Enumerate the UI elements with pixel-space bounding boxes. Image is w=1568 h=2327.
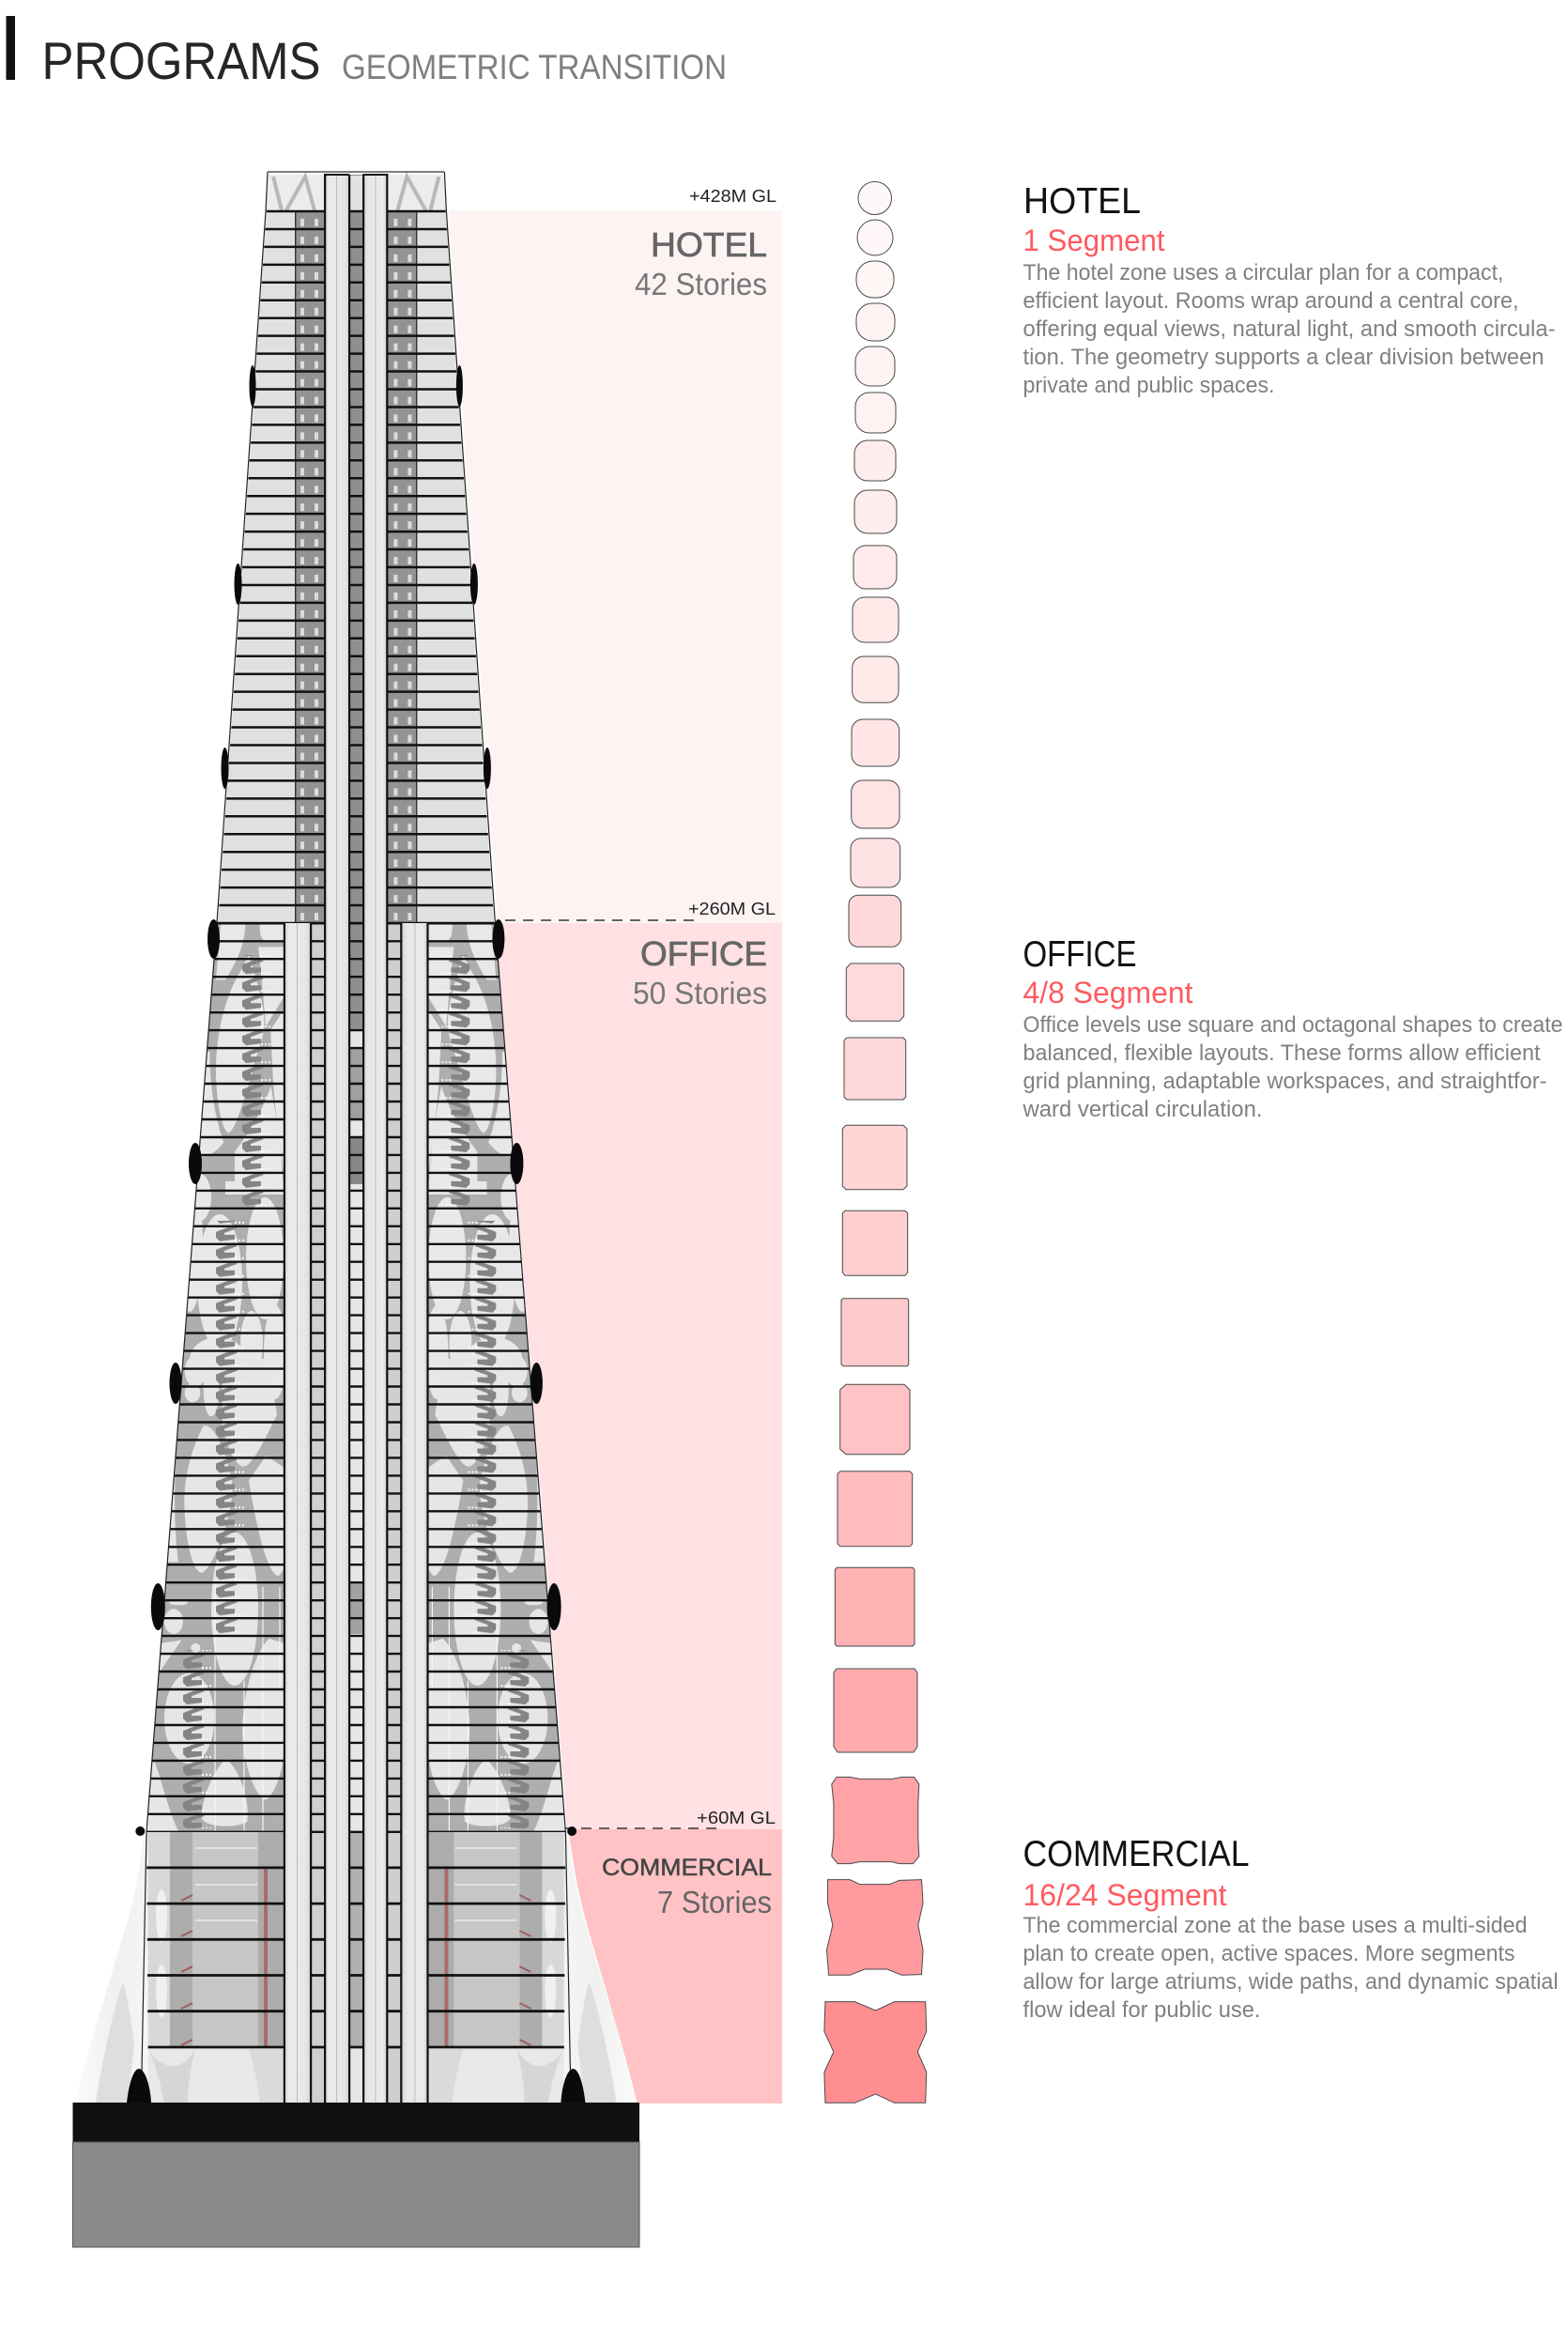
title bar: [6, 16, 15, 80]
roof line: [268, 171, 444, 173]
commercial body text: flow ideal for public use.: [1023, 1997, 1260, 2023]
roof crown: [266, 175, 325, 211]
light lenses lower: [141, 1355, 284, 1831]
structural nodes: [127, 365, 255, 2103]
grey foundation: [73, 2142, 639, 2247]
panel: commercial zone band: [568, 1829, 782, 2104]
title: PROGRAMS: [41, 31, 321, 90]
office body text: ward vertical circulation.: [1022, 1097, 1262, 1122]
panel: office zone band: [496, 923, 782, 1829]
hotel body text: tion. The geometry supports a clear division between: [1023, 345, 1544, 370]
wall column outer: [284, 923, 311, 2103]
hotel body text: offering equal views, natural light, and smooth circula-: [1023, 316, 1555, 342]
commercial heading: COMMERCIAL: [1023, 1834, 1249, 1874]
panel: hotel description: [1023, 181, 1555, 398]
hotel floors: [218, 210, 494, 923]
outer edge line: [142, 172, 268, 2071]
stair clusters: [183, 955, 280, 1828]
hotel segment count: 1 Segment: [1023, 223, 1165, 257]
light lenses middle: [177, 1174, 286, 1399]
right half of tower: [54, 172, 637, 2103]
dashed level line 260: [505, 919, 697, 921]
commercial floors: [146, 1832, 565, 2103]
commercial zone name: COMMERCIAL: [602, 1855, 772, 1881]
hotel body text: efficient layout. Rooms wrap around a central core,: [1023, 288, 1519, 314]
commercial body text: allow for large atriums, wide paths, and dynamic spatial: [1023, 1969, 1559, 1995]
commercial body text: plan to create open, active spaces. More segments: [1023, 1941, 1515, 1966]
geometric transition column: [824, 182, 927, 2103]
office floors and structure: [146, 922, 565, 1832]
office heading: OFFICE: [1023, 934, 1136, 975]
office stories: 50 Stories: [633, 976, 767, 1010]
elevation label 60: +60M GL: [697, 1809, 776, 1827]
elevation label 260: +260M GL: [688, 900, 776, 918]
shape: octagon floor plans: [834, 963, 917, 1752]
service shaft: [310, 923, 402, 2103]
black plinth: [73, 2103, 639, 2142]
office segment count: 4/8 Segment: [1023, 976, 1193, 1009]
hotel body text: The hotel zone uses a circular plan for a compact,: [1023, 260, 1504, 285]
commercial segment count: 16/24 Segment: [1023, 1878, 1227, 1912]
left half of tower: [75, 172, 657, 2103]
panel: commercial description: [1023, 1834, 1559, 2023]
subtitle: GEOMETRIC TRANSITION: [342, 48, 727, 86]
commercial stories: 7 Stories: [657, 1885, 772, 1919]
office body text: balanced, flexible layouts. These forms allow efficient: [1023, 1040, 1541, 1066]
light lenses upper: [200, 923, 284, 1186]
panel: hotel zone band: [449, 187, 782, 923]
hotel body text: [1023, 260, 1555, 398]
hotel zone name: HOTEL: [651, 225, 767, 264]
commercial body text: The commercial zone at the base uses a multi-sided: [1023, 1913, 1527, 1938]
shape: circle floor plans: [849, 182, 901, 947]
elevation label 428: +428M GL: [689, 187, 776, 206]
base flare fin: [75, 1841, 155, 2103]
commercial body text: [1023, 1913, 1559, 2023]
central shaft: [348, 175, 364, 2103]
office body text: grid planning, adaptable workspaces, and straightfor-: [1023, 1069, 1547, 1094]
tower section drawing: [54, 172, 657, 2247]
office zone name: OFFICE: [640, 934, 767, 973]
panel: office description: [1022, 934, 1562, 1122]
dashed level line 60: [563, 1827, 721, 1829]
office body text: [1022, 1012, 1562, 1122]
hotel heading: HOTEL: [1023, 181, 1141, 222]
shape: multi-sided floor plans: [824, 1777, 927, 2103]
hotel body text: private and public spaces.: [1023, 373, 1275, 398]
office body text: Office levels use square and octagonal shapes to create: [1023, 1012, 1562, 1038]
main core column: [324, 174, 349, 2103]
hotel stories: 42 Stories: [635, 267, 767, 301]
